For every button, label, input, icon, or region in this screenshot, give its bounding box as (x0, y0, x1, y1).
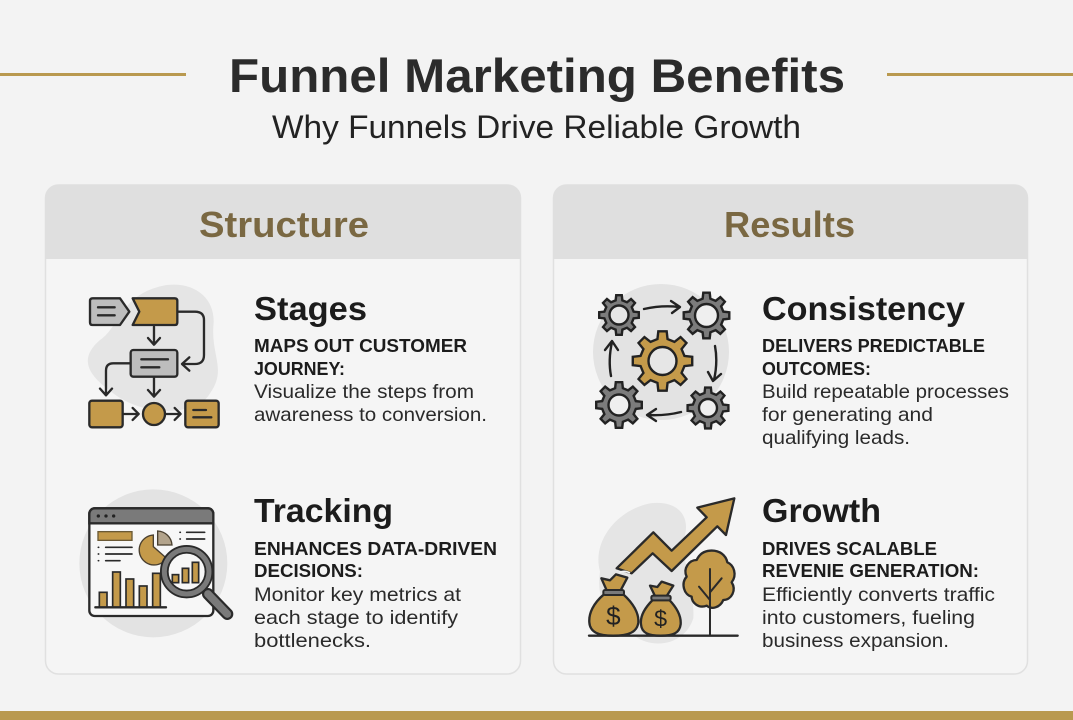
panel: structure (45, 185, 521, 674)
text: growth: Efficiently converts traffic (762, 584, 995, 606)
title header: Why Funnels Drive Reliable Growth (272, 109, 801, 145)
text: growth: REVENIE GENERATION: (762, 560, 979, 581)
text: tracking: Tracking (254, 492, 393, 529)
text: growth: into customers, fueling (762, 607, 975, 629)
icon: growth arrow with money bags and tree (589, 498, 738, 644)
text: stages (254, 290, 487, 426)
text: growth: business expansion. (762, 630, 949, 652)
text: stages: awareness to conversion. (254, 404, 487, 426)
icon: flowchart stages (88, 285, 219, 427)
text: consistency: for generating and (762, 404, 933, 426)
panel: results (553, 185, 1028, 674)
text: growth (762, 492, 995, 652)
icon: growth arrow with money bags and tree: $ (606, 601, 621, 631)
text: tracking: DECISIONS: (254, 560, 363, 581)
text: growth: Growth (762, 492, 881, 529)
text: tracking: bottlenecks. (254, 630, 371, 652)
footer bar (0, 711, 1073, 720)
text: tracking (254, 492, 497, 652)
text: tracking: each stage to identify (254, 607, 458, 629)
text: consistency: qualifying leads. (762, 427, 910, 449)
text: growth: DRIVES SCALABLE (762, 538, 937, 559)
icon: growth arrow with money bags and tree: $ (654, 605, 667, 631)
text: stages: JOURNEY: (254, 358, 345, 379)
text: consistency: Build repeatable processes (762, 381, 1009, 403)
text: stages: MAPS OUT CUSTOMER (254, 335, 467, 356)
text: consistency (762, 290, 1009, 449)
text: tracking: ENHANCES DATA-DRIVEN (254, 538, 497, 559)
text: consistency: OUTCOMES: (762, 358, 871, 379)
text: stages: Visualize the steps from (254, 381, 474, 403)
text: consistency: Consistency (762, 290, 966, 327)
icon: gears cycle (593, 284, 729, 428)
text: consistency: DELIVERS PREDICTABLE (762, 335, 985, 356)
title header (0, 49, 1073, 145)
panel: structure: Structure (199, 204, 369, 245)
text: stages: Stages (254, 290, 367, 327)
icon: analytics dashboard (79, 489, 227, 637)
title header: Funnel Marketing Benefits (229, 49, 845, 102)
panel: results: Results (724, 204, 855, 245)
text: tracking: Monitor key metrics at (254, 584, 462, 606)
